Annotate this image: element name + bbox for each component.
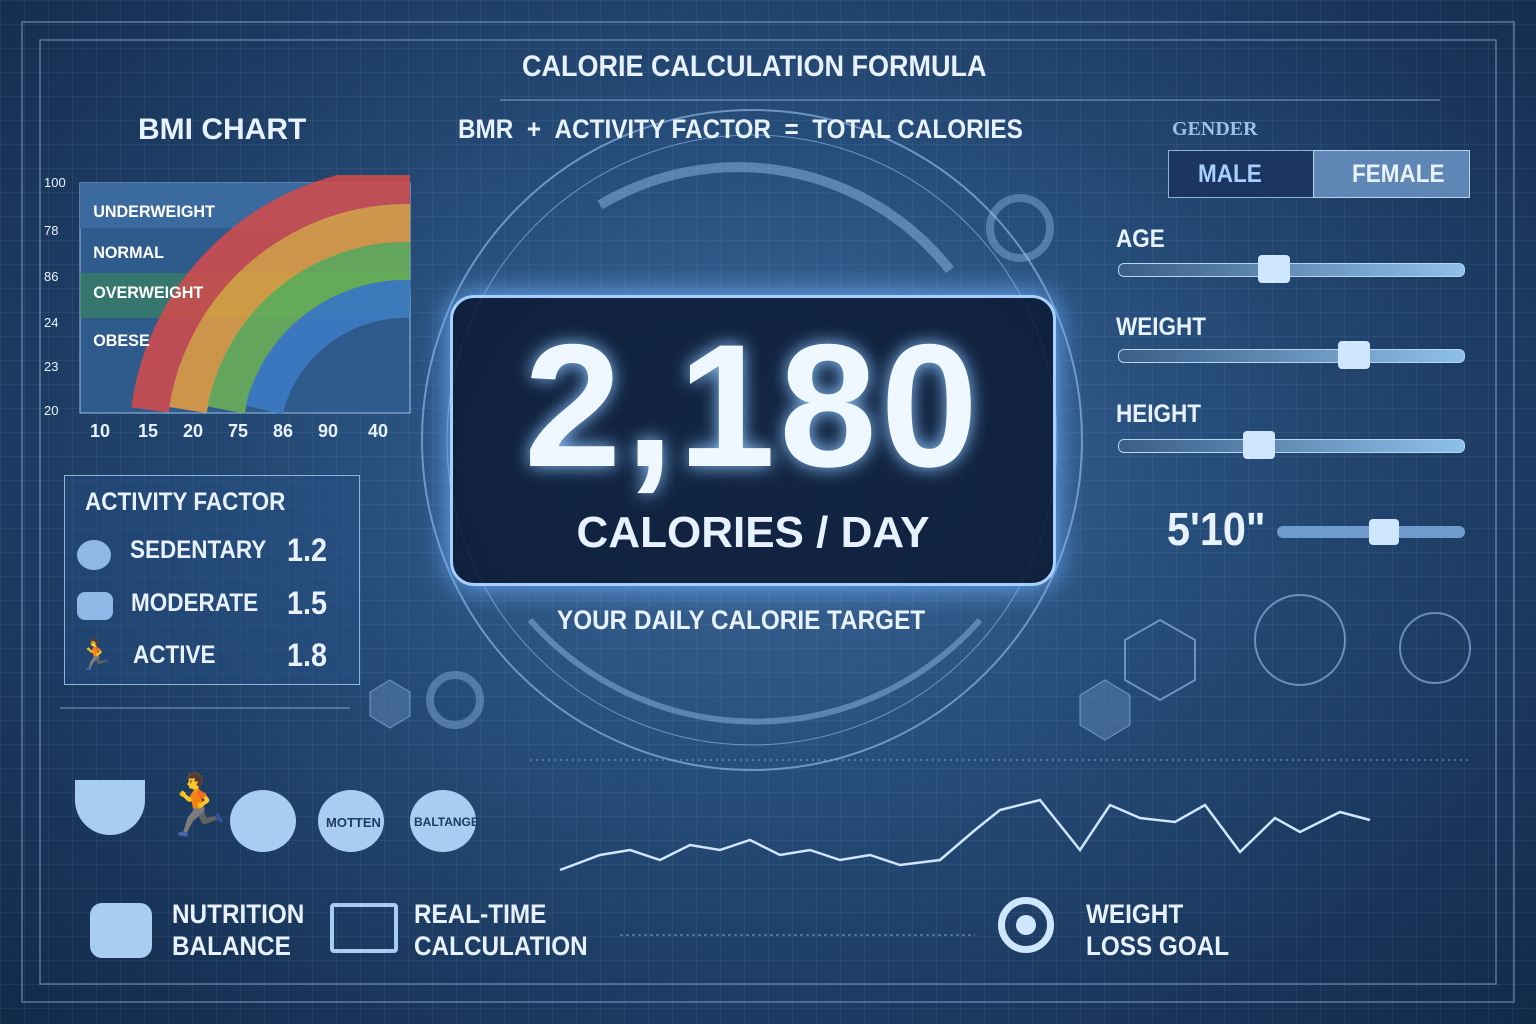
bottom icons: BALTANGE [414, 815, 479, 829]
BMI chart: OVERWEIGHT [93, 283, 203, 302]
feature: nutrition: BALANCE [172, 931, 291, 961]
line chart [560, 800, 1370, 870]
BMI chart [44, 175, 410, 441]
activity factor panel: ACTIVE [133, 641, 216, 669]
gender [1168, 118, 1470, 198]
sliders [1116, 225, 1465, 459]
bottom icons: MOTTEN [326, 815, 381, 830]
BMI chart: 23 [44, 359, 58, 374]
feature: real-time [330, 899, 588, 961]
BMI heading: BMI CHART [138, 113, 306, 146]
main display [450, 295, 1056, 586]
BMI chart: NORMAL [93, 243, 164, 262]
activity factor panel: SEDENTARY [130, 536, 266, 564]
feature: weight loss [998, 897, 1229, 961]
BMI chart: 100 [44, 175, 66, 190]
bottom icons: 🏃 [160, 772, 235, 839]
main display: 2,180 [524, 309, 982, 504]
gender: GENDER [1172, 118, 1258, 140]
feature: real-time: CALCULATION [414, 931, 588, 961]
feature: nutrition: NUTRITION [172, 899, 304, 929]
subtitle: YOUR DAILY CALORIE TARGET [557, 605, 925, 635]
BMI chart: 15 [138, 421, 158, 441]
activity factor panel: 1.8 [287, 637, 327, 673]
feature: weight loss: LOSS GOAL [1086, 931, 1229, 961]
BMI chart: 10 [90, 421, 110, 441]
BMI chart: OBESE [93, 331, 150, 350]
feature: weight loss: WEIGHT [1086, 899, 1183, 929]
activity factor panel: 🏃 [77, 639, 114, 672]
BMI chart: 40 [368, 421, 388, 441]
feature: nutrition [90, 899, 304, 961]
gender: MALE [1198, 160, 1262, 188]
BMI chart: UNDERWEIGHT [93, 202, 215, 221]
feature: real-time: REAL-TIME [414, 899, 546, 929]
BMI chart: 78 [44, 223, 58, 238]
bottom icons [75, 772, 479, 852]
height value: 5'10" [1167, 503, 1266, 555]
sliders: AGE [1116, 225, 1165, 253]
BMI chart: 24 [44, 315, 58, 330]
sliders: HEIGHT [1116, 400, 1201, 428]
central ring [370, 110, 1470, 770]
sliders: WEIGHT [1116, 313, 1206, 341]
BMI chart: 90 [318, 421, 338, 441]
gender: FEMALE [1352, 160, 1445, 188]
activity factor panel: ACTIVITY FACTOR [85, 488, 285, 516]
activity factor panel: 1.2 [287, 532, 327, 568]
main display: CALORIES / DAY [577, 508, 929, 557]
title: CALORIE CALCULATION FORMULA [522, 50, 986, 83]
BMI chart: 86 [273, 421, 293, 441]
activity factor panel: MODERATE [131, 589, 258, 617]
BMI chart: 20 [44, 403, 58, 418]
BMI chart: 75 [228, 421, 248, 441]
activity factor panel: 1.5 [287, 585, 327, 621]
BMI chart: 20 [183, 421, 203, 441]
activity factor panel [64, 475, 360, 685]
formula: BMR + ACTIVITY FACTOR = TOTAL CALORIES [458, 114, 1023, 144]
BMI chart: 86 [44, 269, 58, 284]
height value [1167, 503, 1465, 555]
